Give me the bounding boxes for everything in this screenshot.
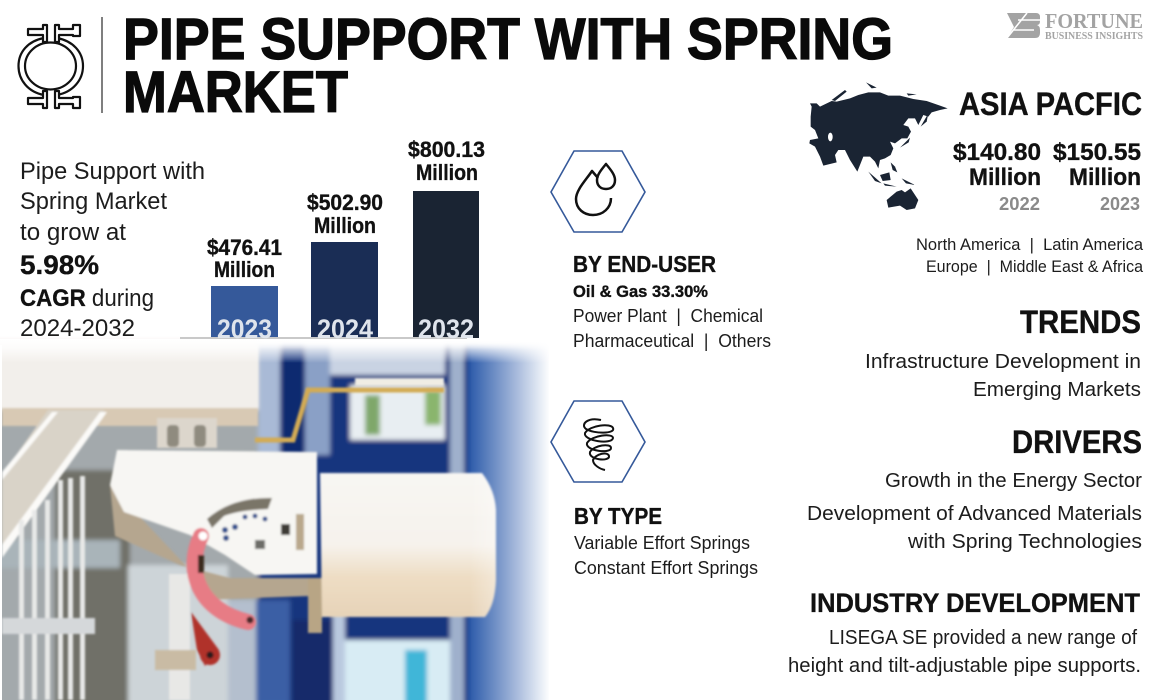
value labels: $476.41 — [207, 235, 282, 260]
value labels: $502.90 — [307, 190, 383, 215]
text block: market growth: CAGR during — [20, 285, 154, 312]
bar 2023 — [211, 286, 278, 338]
text block: industry development: LISEGA SE provided a new range of — [829, 627, 1137, 649]
text block: Asia Pacific: ASIA PACFIC — [959, 86, 1142, 122]
text block: market growth: Pipe Support with — [20, 158, 205, 185]
text block: trends: Emerging Markets — [973, 379, 1141, 401]
map: Asia Pacific — [809, 82, 948, 210]
text block: Asia Pacific: 2022 — [999, 194, 1040, 214]
text block: Asia Pacific: Million — [969, 164, 1041, 191]
text block: Asia Pacific: 2023 — [1100, 194, 1140, 214]
year labels — [217, 314, 474, 344]
housing — [110, 485, 310, 600]
value labels: Million — [416, 160, 478, 185]
text block: by type: BY TYPE — [574, 503, 662, 529]
text block: Asia Pacific: $140.80 — [953, 139, 1041, 166]
text block: Asia Pacific — [916, 86, 1144, 276]
year labels: 2023 — [217, 314, 272, 344]
chart axis — [180, 337, 467, 339]
bar chart — [180, 137, 485, 344]
text block: by end-user: Power Plant | Chemical — [573, 306, 763, 326]
text block: by end-user: Oil & Gas 33.30% — [573, 283, 708, 301]
yellow conduit — [255, 390, 444, 440]
text block: Asia Pacific: North America | Latin America — [916, 235, 1144, 254]
text block: trends: Infrastructure Development in — [865, 351, 1141, 373]
beam — [2, 345, 258, 408]
grey post — [169, 574, 190, 700]
year labels: 2024 — [317, 314, 373, 344]
value labels: Million — [214, 257, 275, 282]
text block: by type — [574, 503, 758, 578]
text block: Asia Pacific: Europe | Middle East & Africa — [926, 257, 1144, 276]
text block: market growth: to grow at — [20, 219, 126, 246]
text block: trends: TRENDS — [1020, 304, 1141, 340]
pink bracket — [195, 536, 248, 622]
red arm — [191, 612, 219, 666]
text block: trends — [865, 304, 1141, 401]
text block: market growth — [20, 158, 205, 342]
text block: by type: Constant Effort Springs — [574, 558, 758, 578]
white rods — [19, 476, 85, 700]
text block: by end-user: BY END-USER — [573, 251, 716, 277]
text block: drivers — [807, 424, 1142, 553]
value labels — [207, 137, 485, 282]
title: PIPE SUPPORT WITH SPRING — [123, 7, 893, 72]
icon: oil drops in hexagon — [551, 151, 645, 232]
text block: drivers: Development of Advanced Materials — [807, 503, 1142, 525]
text block: market growth: Spring Market — [20, 188, 167, 215]
text block: drivers: DRIVERS — [1012, 424, 1142, 460]
icon: pipe clamp — [18, 25, 83, 108]
bar 2032 — [413, 191, 479, 338]
photo: pipe support with spring unit — [0, 335, 579, 700]
cylinder — [320, 473, 496, 617]
text block: by type: Variable Effort Springs — [574, 533, 750, 553]
logo: Fortune Business Insights: FORTUNE — [1045, 9, 1143, 33]
text block: industry development — [788, 588, 1141, 677]
text block: industry development: INDUSTRY DEVELOPMENT — [810, 588, 1140, 618]
title: MARKET — [123, 60, 348, 125]
text block: Asia Pacific: Million — [1069, 164, 1141, 191]
text block: by end-user — [573, 251, 771, 351]
bar 2024 — [311, 242, 378, 338]
logo: Fortune Business Insights — [1007, 9, 1143, 42]
text block: market growth: 5.98% — [20, 250, 99, 280]
text block: Asia Pacific: $150.55 — [1053, 139, 1141, 166]
icon: spring in hexagon — [551, 401, 645, 482]
text block: drivers: with Spring Technologies — [907, 531, 1142, 553]
text block: by end-user: Pharmaceutical | Others — [573, 331, 771, 351]
year labels: 2032 — [418, 314, 474, 344]
text block: drivers: Growth in the Energy Sector — [885, 470, 1142, 492]
title divider — [101, 17, 103, 113]
value labels: $800.13 — [408, 137, 485, 162]
text block: market growth: 2024-2032 — [20, 315, 135, 342]
value labels: Million — [314, 213, 376, 238]
text block: industry development: height and tilt-adjustable pipe supports. — [788, 655, 1141, 677]
logo: Fortune Business Insights: BUSINESS INSIGHTS — [1045, 31, 1143, 42]
